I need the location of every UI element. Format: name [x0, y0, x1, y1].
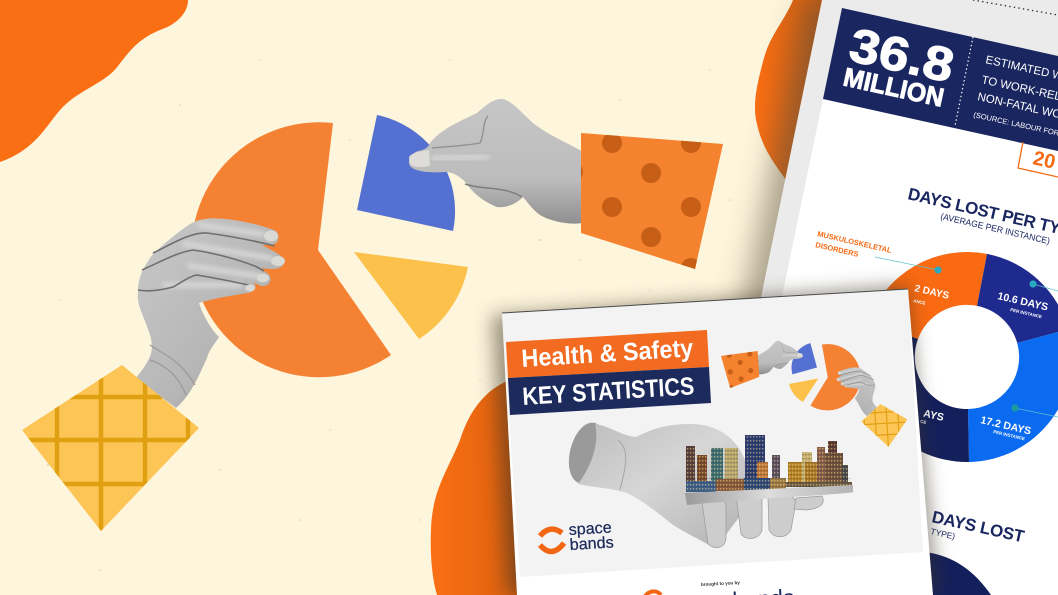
leader line: musculoskeletal [875, 257, 942, 274]
shadow: front sheet [492, 285, 938, 595]
mini collage [720, 333, 909, 456]
big number unit: MILLION [841, 62, 947, 113]
shadow: back sheet [684, 0, 1058, 595]
donut label: 17.2 days: PER INSTANCE [993, 429, 1026, 441]
donut label: 17.2 days: 17.2 DAYS [979, 414, 1032, 438]
front sheet: top edge line [502, 289, 908, 313]
pie slice: yellow [354, 252, 468, 339]
back sheet [700, 0, 1058, 595]
front sheet [502, 289, 933, 595]
finger highlights [165, 225, 270, 285]
donut segment: blue [968, 329, 1058, 462]
phone [685, 485, 853, 505]
donut label: orange: ANCE [913, 298, 926, 306]
title banner: key statistics: KEY STATISTICS [522, 372, 695, 411]
hand: right, pinching blue slice [409, 99, 582, 224]
banner: 36.8 million [823, 8, 1058, 151]
hand: left, holding pie [136, 218, 285, 408]
donut label: orange: 2 DAYS [913, 283, 950, 302]
sleeve: orange polka dot [563, 133, 723, 278]
pie slice: blue [357, 115, 455, 231]
donut chart [862, 252, 1058, 462]
leader line: blue [1011, 404, 1058, 417]
hand holding phone [540, 419, 853, 595]
donut segment: navy [862, 321, 969, 462]
donut label: navy: CE [920, 419, 927, 425]
background speckles [47, 59, 731, 571]
donut label: navy: AYS [922, 408, 945, 424]
lower fingers [702, 489, 823, 548]
finger nails [245, 230, 285, 292]
leader line: indigo [1029, 280, 1058, 291]
skyline [686, 435, 852, 492]
donut label: 10.6 days: 10.6 DAYS [996, 290, 1049, 314]
front sheet: white base [502, 289, 933, 595]
collage: pie and hands [22, 99, 723, 531]
sleeve: yellow check [22, 365, 199, 531]
label: musculoskeletal: MUSKULOSKELETAL [817, 229, 893, 255]
year box: 20 [1031, 147, 1057, 174]
blob: behind back sheet [755, 0, 840, 185]
logo mark [540, 529, 564, 552]
front sheet: grey cover [502, 289, 923, 577]
second chart: partial pie [925, 552, 991, 595]
donut segment: orange [868, 252, 987, 339]
blob: behind front sheet [431, 380, 540, 595]
finger creases [138, 233, 275, 291]
donut label: 10.6 days: PER INSTANCE [1010, 307, 1043, 319]
dotted line: top [973, 0, 1058, 15]
year box [1018, 142, 1058, 177]
footer logo cut off [645, 585, 795, 595]
back sheet: grey margin [700, 0, 1058, 595]
donut segment: indigo [977, 254, 1058, 343]
banner description [973, 54, 1058, 148]
subheading: (AVERAGE PER INSTANCE) [940, 211, 1051, 246]
big number: 36.8 [845, 19, 959, 93]
thumb nail [409, 150, 430, 167]
logo word: bands [569, 534, 614, 554]
palm [578, 424, 752, 547]
title banner: health and safety: Health & Safety [521, 334, 694, 373]
back sheet: white content area [720, 99, 1058, 595]
forearm [563, 419, 611, 487]
brought to you by: brought to you by [701, 580, 740, 587]
blob: top-left orange [0, 0, 188, 162]
pie chart: orange main piece [192, 122, 391, 377]
logo: space bands [540, 519, 614, 554]
label: musculoskeletal: DISORDERS [815, 240, 859, 259]
logo word [568, 519, 614, 554]
subheading: type: TYPE) [930, 526, 956, 541]
heading: days lost second: DAYS LOST [930, 507, 1027, 546]
logo word: space [568, 519, 612, 539]
divider [955, 37, 973, 126]
